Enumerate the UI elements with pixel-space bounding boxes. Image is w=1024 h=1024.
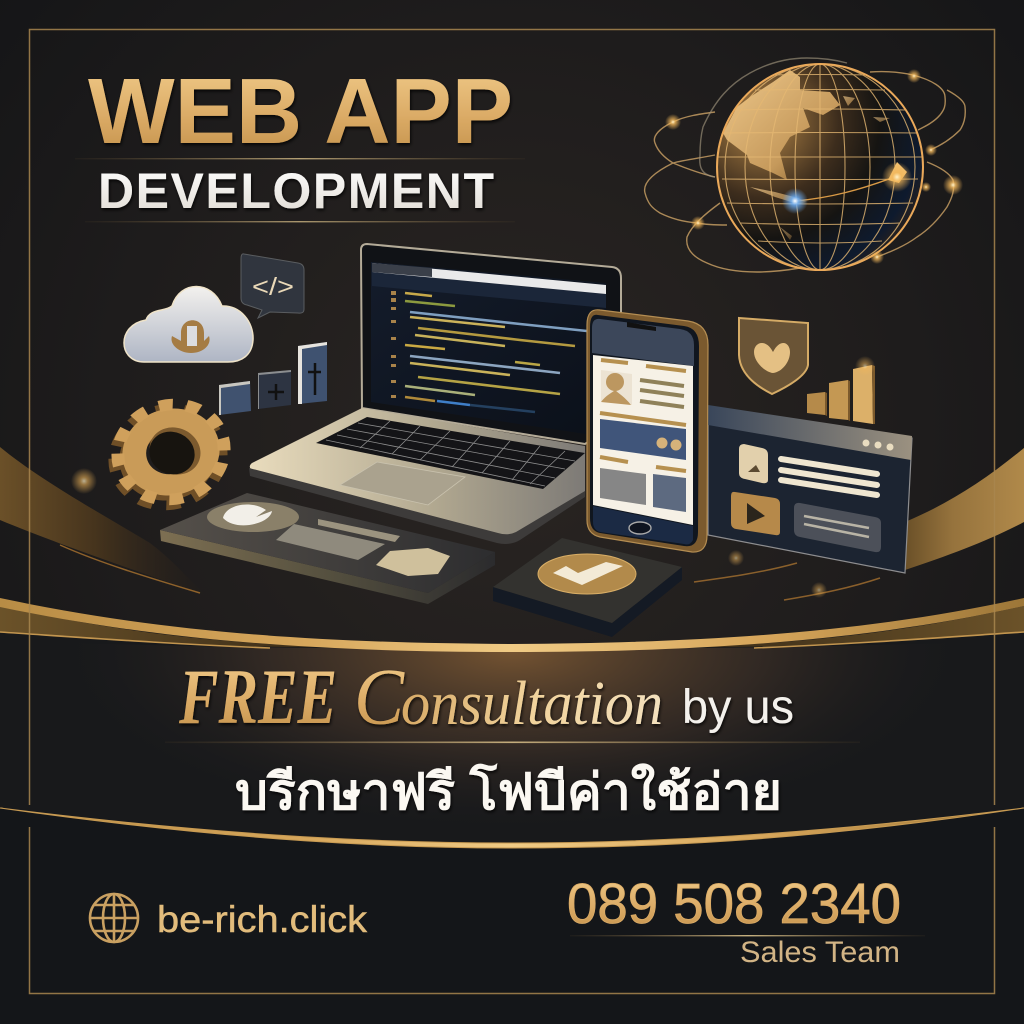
window text lines	[781, 459, 877, 495]
left gold swoosh	[0, 447, 205, 595]
orbit rings	[645, 58, 965, 272]
laptop base	[250, 408, 585, 536]
window text card	[794, 503, 881, 552]
phone number: 089 508 2340	[567, 872, 901, 936]
window play button	[731, 492, 780, 535]
C initial: C	[354, 654, 406, 742]
keyboard	[316, 417, 585, 489]
laptop lid	[361, 244, 621, 444]
gear face	[107, 393, 235, 511]
globe sparks	[665, 69, 963, 264]
title: DEVELOPMENT: DEVELOPMENT	[98, 163, 494, 219]
icon: code bubble	[241, 254, 304, 318]
smartphone	[587, 310, 708, 552]
globe rim	[717, 64, 923, 270]
band top gold stripe	[0, 598, 1024, 652]
globe with orbits	[645, 58, 965, 272]
contact divider	[570, 935, 925, 936]
phone screen	[593, 355, 693, 525]
window image tile	[739, 444, 768, 483]
laptop screen	[371, 262, 606, 437]
icon: block chart	[219, 342, 327, 415]
consultation band	[0, 598, 1024, 1024]
consultation divider	[165, 742, 860, 743]
Thai headline: บรีกษาฟรี โฟบีค่าใช้อ่าย	[235, 762, 782, 820]
laptop	[249, 244, 621, 544]
lower area tint	[0, 808, 1024, 1024]
title: WEB APP: WEB APP	[88, 59, 513, 163]
decorative sparks	[71, 468, 827, 598]
icon: gold bar chart	[807, 356, 875, 424]
gear side wall	[104, 398, 232, 516]
website url: be-rich.click	[157, 899, 368, 940]
phone avatar	[601, 370, 632, 405]
icon: shield heart	[739, 318, 808, 394]
band right brown wedge	[694, 606, 1024, 647]
globe sphere	[717, 64, 923, 270]
band bottom gold curve	[0, 808, 1024, 848]
icon: gear	[104, 393, 235, 516]
graticule	[717, 64, 923, 270]
trackpad	[340, 462, 465, 505]
onsultation: onsultation	[401, 670, 663, 738]
FREE: FREE	[178, 653, 337, 740]
website contact	[90, 894, 368, 942]
consultation text	[178, 653, 794, 742]
phone contact	[567, 872, 925, 969]
check tile	[493, 538, 682, 637]
icon: code bubble: </>	[252, 273, 294, 301]
subtitle divider	[85, 221, 515, 222]
band top thin lines	[0, 632, 1024, 648]
dashboard window	[708, 405, 912, 573]
tablet avatar	[207, 502, 299, 532]
continents	[723, 70, 890, 240]
window title bar	[708, 405, 912, 460]
right gold swoosh	[694, 448, 1024, 600]
icon: web globe	[90, 894, 138, 942]
band left brown wedge	[0, 606, 330, 647]
icon: cloud download	[124, 286, 253, 362]
sales team label: Sales Team	[740, 936, 900, 969]
by us: by us	[682, 681, 794, 734]
title divider	[75, 158, 525, 159]
phone home button	[629, 522, 651, 534]
tablet panel	[160, 493, 495, 604]
